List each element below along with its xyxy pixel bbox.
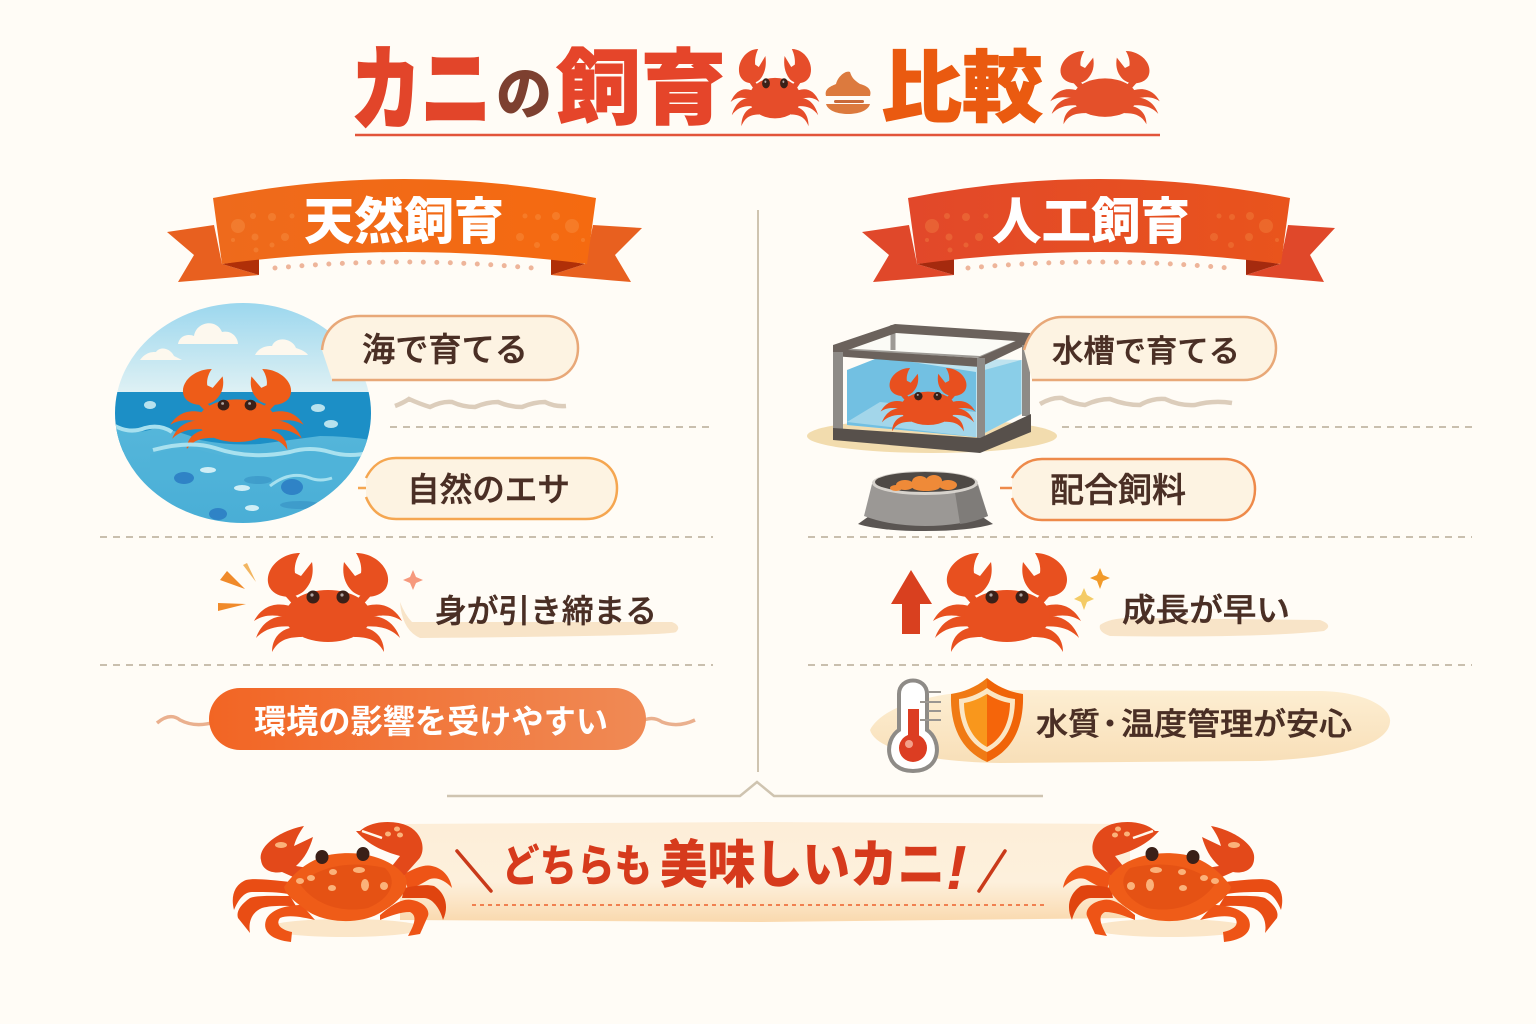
text: fast growth: 成長が早い [1122, 592, 1290, 628]
icon: crab with burst [218, 553, 678, 652]
center divider [757, 210, 759, 772]
slash left [457, 851, 491, 891]
ribbon heading: natural farming: 天然飼育 [304, 194, 504, 250]
label pill: raised in tank [1024, 317, 1276, 380]
title: 比較 [881, 44, 1043, 132]
wavy decoration [395, 399, 566, 407]
label strip: quality control: 温度管理が安心 [1121, 707, 1352, 742]
label pill: raised in sea [322, 316, 578, 380]
text: fast growth [1100, 592, 1328, 636]
title underline [355, 134, 1160, 136]
ribbon heading: artificial farming: 人工飼育 [992, 194, 1190, 250]
text: both delicious: ! [946, 834, 967, 903]
dotted line [472, 904, 1045, 906]
ribbon heading: artificial farming [862, 179, 1335, 282]
panel: conclusion banner [233, 822, 1282, 942]
title: の [496, 62, 552, 127]
illustration: crab in the sea [115, 303, 371, 523]
bottom bracket [447, 782, 1043, 796]
text: both delicious: 美味しいカニ [660, 837, 945, 895]
label pill: affected by environment [157, 688, 695, 750]
text: firm meat: 身が引き締まる [435, 593, 657, 629]
icon: title crab silhouette [1050, 51, 1160, 124]
wavy decoration [1040, 398, 1232, 405]
banner strip [400, 822, 1130, 922]
icon: title crab [731, 49, 819, 126]
label pill: natural feed [358, 458, 617, 519]
panel: natural farming [115, 179, 695, 750]
ribbon heading: natural farming [167, 179, 642, 282]
text: both delicious [502, 834, 967, 903]
label pill: raised in tank: 水槽で育てる [1052, 334, 1240, 369]
panel: artificial farming [807, 179, 1390, 771]
label pill: compound feed: 配合飼料 [1050, 472, 1186, 510]
icon: feed bowl [858, 471, 993, 531]
label strip: quality control [870, 690, 1390, 763]
icon: thermometer [889, 680, 941, 771]
icon: title bowl [826, 72, 871, 114]
slash right [979, 851, 1005, 891]
icon: right crab [1063, 822, 1282, 942]
text: both delicious: どちらも [502, 842, 652, 891]
label pill: compound feed [1000, 459, 1255, 520]
label pill: raised in sea: 海で育てる [362, 331, 528, 368]
illustration: crab in aquarium [807, 324, 1057, 453]
icon: up arrow and crab [891, 553, 1110, 652]
label strip: quality control: 水質 [1036, 707, 1100, 742]
title: 飼育 [556, 44, 726, 135]
label pill: affected by environment: 環境の影響を受けやすい [254, 703, 608, 740]
label pill: natural feed: 自然のエサ [407, 471, 570, 508]
icon: left crab [233, 822, 452, 942]
title [351, 40, 1160, 142]
title: カニ [351, 40, 491, 142]
icon: shield [951, 678, 1023, 762]
